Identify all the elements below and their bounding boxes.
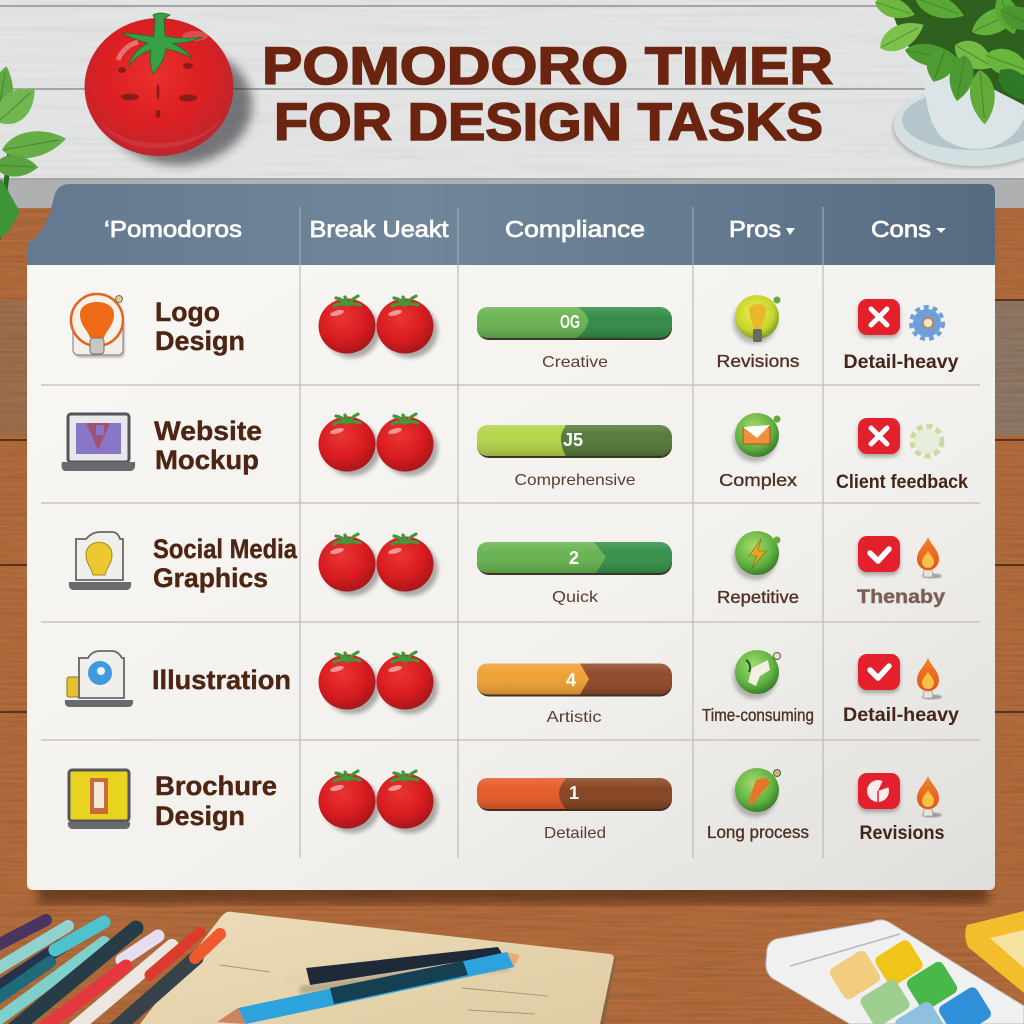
icon: laptop with bulb [69,532,131,590]
tomatoes [318,414,438,476]
table header bar: Compliance [505,216,645,242]
progress bar [477,425,672,458]
row 3: social media graphics: Quick [552,589,599,606]
tomatoes [318,296,438,358]
row 3: social media graphics: Graphics [153,563,268,593]
row 3: social media graphics: Social Media [153,534,298,564]
row 1: logo design [71,294,959,373]
row 1: logo design: Design [155,326,245,356]
table header bar [27,184,995,265]
icon: cons cross and light gear [858,418,942,457]
icon: pros bulb [733,295,780,344]
notebook [140,912,616,1024]
icon: large tomato [84,13,252,165]
progress bar [477,307,672,340]
panel: table [27,184,995,890]
progress bar [477,664,672,696]
row 2: website mockup: Website [154,416,262,446]
tomato stem and calyx [122,13,203,74]
row 1: logo design: Revisions [716,351,800,371]
icon: pros envelope [733,413,780,462]
icon: cons cross and gear [858,299,943,339]
row 5: brochure design: Detailed [544,825,606,842]
row 1: logo design: Creative [542,354,608,371]
icon: framed brochure [68,770,130,829]
row 2: website mockup: Complex [719,470,797,490]
row 1: logo design: Detail-heavy [844,352,959,373]
tomatoes [318,534,438,596]
row 5: brochure design: Revisions [860,823,944,844]
progress bar [477,542,672,575]
icon: cons check and flame [858,654,942,700]
icon: pros carrot [733,768,780,817]
tomatoes [318,652,438,714]
row 5: brochure design: Design [155,801,245,831]
row 2: website mockup: Client feedback [836,472,968,493]
table header bar: Break Ueakt [310,216,449,242]
row 3: social media graphics: Repetitive [717,587,799,607]
icon: potted plant on saucer [872,0,1024,168]
icon: logo bulb [71,294,125,358]
progress bar: 1 [569,783,579,803]
phone with colour tiles [766,920,1024,1024]
table header bar: ‘Pomodoros [104,216,242,242]
panel drop shadow [38,880,988,904]
progress bar: J5 [563,430,583,450]
row 3: social media graphics: Thenaby [857,587,945,608]
row 4: illustration: Artistic [546,709,602,726]
background: brown wood table [0,208,1024,1024]
icon: pros lightning [733,531,780,580]
row 5: brochure design: Brochure [155,771,277,801]
row 3: social media graphics [69,531,945,608]
row 4: illustration: Time-consuming [702,705,814,725]
progress bar: OG [560,312,580,332]
progress bar: 2 [569,548,579,568]
coloured markers [0,920,220,1024]
icon: cons chart and flame [858,773,942,818]
row 2: website mockup [62,413,968,493]
row 5: brochure design: Long process [707,822,809,842]
yellow notebook [965,911,1024,993]
row 1: logo design: Logo [155,297,220,327]
icon: tablet with blue badge [65,651,133,707]
progress bar [477,778,672,811]
table header bar: Cons [871,216,931,242]
progress bar: 4 [566,670,576,690]
pencils on notebook [217,947,520,1024]
icon: left plant [0,64,68,240]
icon: pros leaf badge [733,650,780,699]
background: white wood planks [0,0,1024,210]
row 5: brochure design [68,768,945,844]
row 2: website mockup: Comprehensive [514,472,636,489]
title: FOR DESIGN TASKS [274,93,823,152]
title: POMODORO TIMER [262,37,833,96]
row 2: website mockup: Mockup [155,445,259,475]
title [262,37,833,152]
icon: cons check and flame [858,536,942,578]
row 4: illustration: Illustration [152,665,291,695]
panel body [27,262,995,890]
row 4: illustration [65,650,959,726]
tomatoes [318,771,438,833]
row 4: illustration: Detail-heavy [843,705,959,726]
icon: laptop [62,414,135,471]
table header bar: Pros [729,216,781,242]
